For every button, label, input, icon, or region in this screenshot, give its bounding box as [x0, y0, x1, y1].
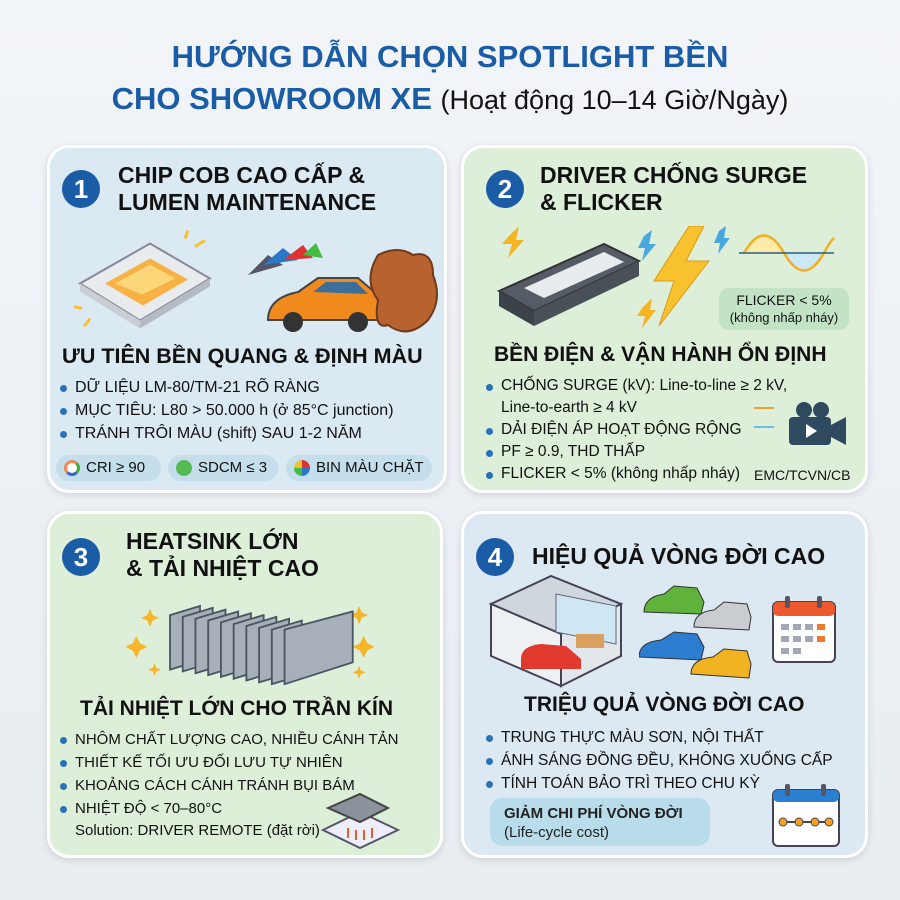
heading 1: LUMEN MAINTENANCE [118, 189, 376, 215]
bullets 1 [60, 378, 394, 442]
bullets 2: Line-to-earth ≥ 4 kV [501, 399, 637, 416]
bullets 3: THIẾT KẾ TỐI ƯU ĐỐI LƯU TỰ NHIÊN [75, 754, 343, 771]
panel: 2 driver [461, 145, 868, 493]
icon: showroom room [488, 574, 624, 688]
panel: 1 chip COB [47, 145, 447, 493]
bullets 4 [486, 728, 833, 792]
number 3 [62, 538, 100, 576]
callout: life-cycle cost [490, 798, 710, 846]
bullets 4: ÁNH SÁNG ĐỒNG ĐỀU, KHÔNG XUỐNG CẤP [501, 752, 833, 769]
subheading 2: BỀN ĐIỆN & VẬN HÀNH ỔN ĐỊNH [494, 343, 827, 366]
icon: camera [754, 402, 846, 445]
subheading 3: TẢI NHIỆT LỚN CHO TRẦN KÍN [80, 697, 393, 720]
heading 1: CHIP COB CAO CẤP & [118, 162, 365, 188]
icon: driver box with lightning [496, 226, 730, 328]
title: HƯỚNG DẪN CHỌN SPOTLIGHT BỀN [172, 39, 728, 74]
heading 2: DRIVER CHỐNG SURGE [540, 162, 807, 188]
heading 4: HIỆU QUẢ VÒNG ĐỜI CAO [532, 543, 825, 569]
bullets 4: TRUNG THỰC MÀU SƠN, NỘI THẤT [501, 729, 764, 746]
bullets 1: MỤC TIÊU: L80 > 50.000 h (ở 85°C junction) [75, 402, 394, 419]
icon: car with swatches and leather [248, 243, 438, 332]
heading 1 [118, 162, 376, 215]
panel: 4 life cycle [461, 511, 868, 858]
number 1 [62, 170, 100, 208]
title [112, 39, 788, 116]
number 1: 1 [74, 174, 88, 204]
number 3: 3 [74, 542, 88, 572]
icon: calendar [772, 596, 836, 663]
callout: flicker: (không nhấp nháy) [730, 310, 838, 325]
bullets 2: DẢI ĐIỆN ÁP HOẠT ĐỘNG RỘNG [501, 421, 742, 438]
bullets 4: TÍNH TOÁN BẢO TRÌ THEO CHU KỲ [501, 775, 760, 792]
number 4 [476, 538, 514, 576]
heading 3: HEATSINK LỚN [126, 528, 299, 554]
bullets 1: DỮ LIỆU LM-80/TM-21 RÕ RÀNG [75, 379, 320, 396]
callout: flicker: FLICKER < 5% [736, 292, 832, 308]
bullets 2: CHỐNG SURGE (kV): Line-to-line ≥ 2 kV, [501, 377, 787, 394]
bullets 1: TRÁNH TRÔI MÀU (shift) SAU 1-2 NĂM [75, 425, 362, 442]
icon: maintenance calendar [772, 784, 840, 847]
callout: flicker [719, 288, 849, 330]
callout: life-cycle cost: (Life-cycle cost) [504, 824, 609, 841]
bullets 2: FLICKER < 5% (không nhấp nháy) [501, 465, 740, 482]
callout: life-cycle cost: GIẢM CHI PHÍ VÒNG ĐỜI [504, 805, 683, 822]
label: EMC: EMC/TCVN/CB [754, 467, 850, 483]
icon: remote driver [320, 792, 400, 850]
pill: BIN [286, 455, 432, 481]
icon: COB chip [74, 230, 212, 328]
icon: sine wave [739, 234, 835, 272]
number 2 [486, 170, 524, 208]
subheading 4: TRIỆU QUẢ VÒNG ĐỜI CAO [524, 693, 804, 716]
bullets 3 [60, 730, 398, 817]
heading 3: & TẢI NHIỆT CAO [126, 555, 319, 581]
icon: heatsink fins [126, 604, 374, 686]
heading 2 [540, 162, 807, 215]
bullets 3: NHIỆT ĐỘ < 70–80°C [75, 800, 222, 817]
pill: BIN: BIN MÀU CHẶT [316, 459, 424, 476]
pill: SDCM: SDCM ≤ 3 [198, 459, 267, 476]
heading 2: & FLICKER [540, 189, 663, 215]
bullets 3: NHÔM CHẤT LƯỢNG CAO, NHIỀU CÁNH TẢN [75, 731, 398, 748]
bullets 2: PF ≥ 0.9, THD THẤP [501, 443, 645, 460]
number 2: 2 [498, 174, 512, 204]
bullets 2 [486, 376, 787, 482]
pill: CRI [56, 455, 161, 481]
panel: 3 heatsink [47, 511, 443, 858]
title: CHO SHOWROOM XE (Hoạt động 10–14 Giờ/Ngày) [112, 81, 788, 116]
heading 3 [126, 528, 319, 581]
subheading 1: ƯU TIÊN BỀN QUANG & ĐỊNH MÀU [62, 344, 423, 368]
icon: cars [639, 586, 752, 678]
number 4: 4 [488, 542, 502, 572]
bullets 3: KHOẢNG CÁCH CÁNH TRÁNH BỤI BÁM [75, 777, 355, 794]
text: solution: Solution: DRIVER REMOTE (đặt rời) [75, 822, 320, 839]
pill: CRI: CRI ≥ 90 [86, 459, 145, 476]
pill: SDCM [168, 455, 278, 481]
